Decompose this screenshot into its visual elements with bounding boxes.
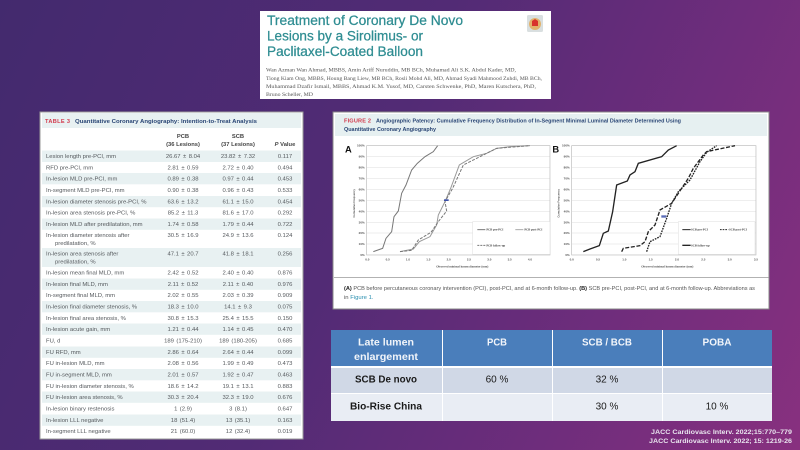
table header row [354,338,732,363]
chart A x axis labels: 4.0 [528,257,532,261]
chart A x axis labels: 0.0 [365,257,370,261]
chart A y axis labels: 60% [359,187,365,191]
table row: SCB De novo: 32 % [596,374,619,386]
row: diameter stenosis pre-PCI: In-lesion diameter stenosis pre-PCI, % [46,199,147,205]
row: area stenosis pre-PCI: 81.6 ± 17.0 [222,210,254,216]
row: FU diameter stenosis: 0.883 [278,384,293,390]
row: final area stenosis: 25.4 ± 15.5 [222,316,254,322]
panel: article title card [260,11,551,99]
curve: SCB post-PCI [622,146,735,252]
panel: table 3 quantitative coronary angiography [40,112,303,439]
row: FU diameter stenosis [46,384,293,390]
row: final MLD: 0.976 [278,282,293,288]
row: FU RFD: FU RFD, mm [46,350,81,356]
row: RFD pre-PCI: 2.72 ± 0.40 [222,165,254,171]
row: acute gain: 0.470 [278,327,293,333]
table header row: SCB / BCB [582,338,632,348]
row: acute gain: 1.21 ± 0.44 [167,327,199,333]
row: FU days: 189 (180-205) [219,339,257,345]
row: MLD after predilatation: In-lesion MLD after predilatation, mm [46,222,143,228]
row: acute gain: In-lesion acute gain, mm [46,327,110,333]
row: FU in-lesion MLD: 2.08 ± 0.56 [167,361,199,367]
row: final area stenosis [46,316,293,322]
chart B: SCB cumulative frequency [552,144,758,268]
row: in-segment final MLD: 2.02 ± 0.55 [167,293,199,299]
text block: references [649,429,792,445]
table column headers: PCB [177,134,189,140]
row: diameter stenosis pre-PCI: 0.454 [278,199,293,205]
row: in-segment final MLD [46,293,292,299]
row: mean final MLD: 2.42 ± 0.52 [167,271,199,277]
icon: journal badge [527,15,543,32]
table header row: enlargement [354,352,419,363]
heading: article title: Lesions by a Sirolimus- or [267,28,424,44]
table column headers: (37 Lesions) [221,142,255,148]
figure caption: (A) PCB before percutaneous coronary intervention (PCI), post-PCI, and at 6-month follow-up. (B) SCB pre-PCI, post-PCI, and at 6-month follow-up. Abbreviations as [344,286,755,292]
row: FU area stenosis [46,395,293,401]
row: acute gain [46,327,293,333]
table header row: POBA [702,338,732,348]
chart B y axis labels: 90% [564,155,570,159]
row: FU in-lesion MLD: 0.473 [278,361,293,367]
chart A x axis labels [365,257,532,268]
row: in-segment LLL negative: In-segment LLL negative [46,429,111,435]
row: FU RFD [46,350,292,356]
table row: Bio-Rise China: Bio-Rise China [350,402,422,412]
row: FU in-segment MLD: 2.01 ± 0.57 [167,372,199,378]
row: RFD pre-PCI: 2.81 ± 0.59 [167,165,199,171]
row: final MLD: 2.11 ± 0.52 [168,282,198,288]
chart A y axis labels: 10% [359,242,365,246]
chart A: PCB cumulative frequency [345,144,550,268]
marker: blue annotation [444,199,449,201]
row: FU diameter stenosis: 19.1 ± 13.1 [222,384,254,390]
chart B y axis labels: 40% [564,209,570,213]
table heading: TABLE 3 [45,119,70,125]
chart B x axis labels: 1.5 [649,257,653,261]
table row: SCB De novo: 60 % [486,374,509,386]
row: in-lesion LLL negative [46,418,293,424]
row: binary restenosis: 1 (2.9) [174,406,192,412]
table column headers: (36 Lesions) [166,142,200,148]
curve: PCB post-PCI [400,146,530,252]
heading: article title: Paclitaxel-Coated Balloon [267,44,423,59]
row: final area stenosis: 0.150 [278,316,293,322]
row: in-segment LLL negative: 12 (32.4) [226,429,250,435]
chart A x axis labels: 2.0 [447,257,451,261]
figure caption [344,286,755,301]
row: area stenosis pre-PCI: 0.292 [278,210,292,216]
row: area stenosis after predilatation: In-lesion area stenosis after [46,252,118,258]
row: in-lesion LLL negative: 0.163 [278,418,293,424]
table column headers: P Value [275,142,296,148]
legend B: SCB follow-up [691,243,710,247]
chart B x axis labels: 0.5 [596,257,600,261]
row: lesion length: 26.67 ± 8.04 [166,154,201,160]
chart A y axis labels: Cumulative Frequency [352,189,356,218]
row: in-lesion LLL negative: 13 (35.1) [226,418,250,424]
row: area stenosis after predilatation: 47.1 ± 20.7 [167,252,199,258]
row: FU area stenosis: 30.3 ± 20.4 [167,395,199,401]
table header row: Late lumen [358,338,414,348]
text block: authors [266,68,542,98]
text block: authors: Wan Azman Wan Ahmad, MBBS, Amin Ariff Nuruddin, MB BCh, Muhamad Ali S.K. Abdul Kader, MD, [266,68,516,74]
row: FU in-lesion MLD [46,361,293,367]
heading: article title [267,13,463,59]
row: binary restenosis [46,406,292,412]
row: in-lesion MLD pre-PCI: 0.453 [278,176,293,182]
row: in-segment LLL negative: 21 (60.0) [171,429,195,435]
legend B [678,222,755,254]
chart A x axis labels: 1.0 [406,257,410,261]
row: in-segment MLD pre-PCI [46,188,293,194]
row: final diameter stenosis: 18.3 ± 10.0 [167,304,199,310]
row: in-segment MLD pre-PCI: In-segment MLD pre-PCI, mm [46,188,125,194]
chart A y axis labels: 30% [359,220,365,224]
row: final diameter stenosis [46,304,293,310]
curve: SCB follow-up [647,146,717,252]
row: lesion length: 0.117 [278,154,292,160]
chart B y axis labels [556,144,570,257]
row: diameter stenosis pre-PCI [46,199,293,205]
chart A x axis labels: 3.5 [508,257,512,261]
row: diameter stenosis after predilatation: predilatation, % [55,241,96,247]
chart A y axis labels: 40% [359,209,365,213]
legend B: SCB post-PCI [729,228,748,232]
chart B x axis labels: 2.5 [701,257,706,261]
legend A [473,222,550,254]
row: MLD after predilatation: 1.74 ± 0.58 [167,222,199,228]
chart A x axis labels: 2.5 [467,257,471,261]
row: mean final MLD: 2.40 ± 0.40 [222,271,254,277]
row: FU RFD: 2.64 ± 0.44 [222,350,254,356]
row: acute gain: 1.14 ± 0.45 [222,327,254,333]
row: in-lesion LLL negative: In-lesion LLL negative [46,418,104,424]
row: FU days [46,339,293,345]
chart B x axis labels: 2.0 [675,257,679,261]
row: in-segment final MLD: 2.03 ± 0.39 [222,293,254,299]
row: FU in-segment MLD: 1.92 ± 0.47 [222,372,254,378]
text block: authors: Bruno Scheller, MD [266,93,314,98]
row: diameter stenosis after predilatation: In-lesion diameter stenosis after [46,233,130,239]
chart B y axis labels: 70% [564,176,570,180]
table row: SCB De novo [355,374,619,386]
legend A: PCB pre-PCI [486,228,504,232]
chart A y axis labels: 80% [359,165,365,169]
row: FU in-lesion MLD: 1.99 ± 0.49 [222,361,254,367]
row: lesion length: Lesion length pre-PCI, mm [46,154,116,160]
figure heading: FIGURE 2 [344,118,371,124]
row: in-segment MLD pre-PCI: 0.533 [278,188,293,194]
row: FU diameter stenosis: FU in-lesion diameter stenosis, % [46,384,135,390]
row: in-lesion LLL negative: 18 (51.4) [171,418,195,424]
row: mean final MLD [46,271,293,277]
chart B y axis labels: 20% [564,231,570,235]
chart A y axis labels: 20% [359,231,365,235]
chart B y axis labels: Cumulative Frequency [556,189,560,218]
row: FU in-segment MLD: FU in-segment MLD, mm [46,372,112,378]
curve: PCB pre-PCI [373,146,438,252]
row: final area stenosis: 30.8 ± 15.3 [167,316,199,322]
row: RFD pre-PCI: RFD pre-PCI, mm [46,165,93,171]
text block: references: JACC Cardiovasc Interv. 2022;15:770–779 [651,429,792,436]
row: area stenosis pre-PCI [46,210,292,216]
chart A: PCB cumulative frequency: A [345,145,352,155]
figure heading [344,118,682,133]
chart B y axis labels: 50% [564,198,570,202]
row: diameter stenosis after predilatation: 24.9 ± 13.6 [222,233,254,239]
chart B y axis labels: 60% [564,187,570,191]
table row: Bio-Rise China: 30 % [596,402,619,412]
table row: Bio-Rise China [350,402,729,412]
chart B x axis labels: 3.5 [754,257,758,261]
chart B x axis labels: 1.0 [622,257,627,261]
row: in-segment MLD pre-PCI: 0.96 ± 0.43 [222,188,254,194]
row: diameter stenosis after predilatation [46,233,293,247]
row: in-segment LLL negative [46,429,292,435]
row: final MLD: 2.11 ± 0.40 [223,282,254,288]
row: FU days: 0.685 [278,339,293,345]
row: binary restenosis: In-lesion binary restenosis [46,406,114,412]
legend A: PCB follow-up [486,243,505,247]
chart A y axis labels: 0% [360,253,365,257]
chart A y axis labels: 70% [359,176,365,180]
text block: references: JACC Cardiovasc Interv. 2022; 15: 1219-26 [649,438,792,445]
row: FU days: 189 (175-210) [164,339,202,345]
chart B: SCB cumulative frequency: B [552,145,559,155]
row: diameter stenosis after predilatation: 30.5 ± 16.9 [167,233,199,239]
row: FU diameter stenosis: 18.6 ± 14.2 [167,384,199,390]
table heading: Quantitative Coronary Angiography: Intention-to-Treat Analysis [75,119,257,125]
chart B y axis labels: 100% [562,144,570,148]
table row: SCB De novo: SCB De novo [355,374,417,386]
chart A y axis labels: 90% [359,155,365,159]
row: area stenosis after predilatation: 41.8 ± 18.1 [222,252,254,258]
row: binary restenosis: 3 (8.1) [229,406,247,412]
row: mean final MLD: In-lesion mean final MLD, mm [46,271,124,277]
row: MLD after predilatation: 1.79 ± 0.44 [222,222,254,228]
row: MLD after predilatation [46,222,292,228]
figure heading: Angiographic Patency: Cumulative Frequency Distribution of In-Segment Minimal Luminal Diameter Determined Using [376,118,682,124]
chart B x axis labels: 0.0 [570,257,574,261]
row: final area stenosis: In-lesion final area stenosis, % [46,316,127,322]
chart A y axis labels: 50% [359,198,365,202]
chart B y axis labels: 0% [565,253,570,257]
chart A x axis labels: 3.0 [487,257,492,261]
row: binary restenosis: 0.647 [278,406,292,412]
chart B y axis labels: 80% [564,165,570,169]
row: final MLD: In-lesion final MLD, mm [46,282,108,288]
row: area stenosis after predilatation: predilatation, % [55,260,96,266]
table column headers [166,134,296,148]
row: in-lesion MLD pre-PCI: In-lesion MLD pre-PCI, mm [46,176,117,182]
row: FU days: FU, d [46,339,60,345]
row: MLD after predilatation: 0.722 [278,222,292,228]
text block: authors: Tiong Kiam Ong, MBBS, Houng Bang Liew, MB BCh, Rosli Mohd Ali, MD, Ahmad Syadi Mahmood Zuhdi, MB BCh, [266,77,542,82]
row: FU in-segment MLD: 0.463 [278,372,293,378]
row: in-lesion MLD pre-PCI: 0.89 ± 0.38 [167,176,199,182]
row: FU in-lesion MLD: FU in-lesion MLD, mm [46,361,105,367]
table header row: PCB [487,338,507,348]
row: area stenosis after predilatation: 0.256 [278,252,293,258]
table row: Bio-Rise China: 10 % [706,402,729,412]
row: mean final MLD: 0.876 [278,271,293,277]
chart B x axis labels [570,257,758,268]
row: diameter stenosis after predilatation: 0.124 [278,233,293,239]
panel: late lumen enlargement table [331,330,772,421]
row: final diameter stenosis: In-lesion final diameter stenosis, % [46,304,138,310]
chart A x axis labels: 0.5 [386,257,390,261]
panel: figure 2 angiographic patency [333,112,769,309]
row: final diameter stenosis: 0.075 [278,304,293,310]
row: lesion length: 23.82 ± 7.32 [221,154,255,160]
chart A x axis labels: 1.5 [426,257,431,261]
row: diameter stenosis pre-PCI: 63.6 ± 13.2 [167,199,199,205]
row: FU RFD: 2.86 ± 0.64 [167,350,199,356]
row: RFD pre-PCI [46,165,293,171]
row: final diameter stenosis: 14.1 ± 9.3 [224,304,253,310]
figure heading: Quantitative Coronary Angiography [344,127,437,133]
chart A y axis labels [352,144,365,257]
figure caption: in Figure 1. [344,295,374,301]
row: FU in-segment MLD [46,372,293,378]
chart A y axis labels: 100% [357,144,365,148]
chart B x axis labels: 3.0 [728,257,732,261]
marker: blue annotation [661,215,666,218]
row: diameter stenosis pre-PCI: 61.1 ± 15.0 [222,199,254,205]
curve: SCB pre-PCI [583,146,677,252]
curve: PCB follow-up [400,146,530,252]
heading: article title: Treatment of Coronary De Novo [267,13,463,28]
row: FU area stenosis: 32.3 ± 19.0 [222,395,254,401]
row: in-segment final MLD: 0.909 [278,293,292,299]
table column headers: SCB [232,134,244,140]
row: FU area stenosis: 0.676 [278,395,293,401]
chart A x axis labels: Observed minimal lumen diameter (mm) [436,264,488,268]
row: area stenosis after predilatation [46,252,293,266]
row: area stenosis pre-PCI: 85.2 ± 11.3 [168,210,199,216]
row: FU RFD: 0.099 [278,350,292,356]
row: in-segment MLD pre-PCI: 0.90 ± 0.38 [167,188,199,194]
row: RFD pre-PCI: 0.494 [278,165,293,171]
chart B y axis labels: 10% [564,242,570,246]
legend A: PCB post-PCI [524,228,543,232]
legend B: SCB pre-PCI [691,228,709,232]
chart B x axis labels: Observed minimal lumen diameter (mm) [641,264,693,268]
row: final MLD [46,282,293,288]
chart B y axis labels: 30% [564,220,570,224]
table rows [46,154,293,435]
row: in-segment final MLD: In-segment final MLD, mm [46,293,115,299]
row: area stenosis pre-PCI: In-lesion area stenosis pre-PCI, % [46,210,136,216]
text block: authors: Muhammad Dzafir Ismail, MBBS, Ahmad K.M. Yusof, MD, Carsten Schwenke, PhD, Maren Kutschera, PhD, [266,85,536,90]
row: in-lesion MLD pre-PCI: 0.97 ± 0.44 [222,176,254,182]
row: in-segment LLL negative: 0.019 [278,429,292,435]
row: lesion length [46,154,292,160]
row: FU area stenosis: FU in-lesion area stenosis, % [46,395,123,401]
row: in-lesion MLD pre-PCI [46,176,293,182]
